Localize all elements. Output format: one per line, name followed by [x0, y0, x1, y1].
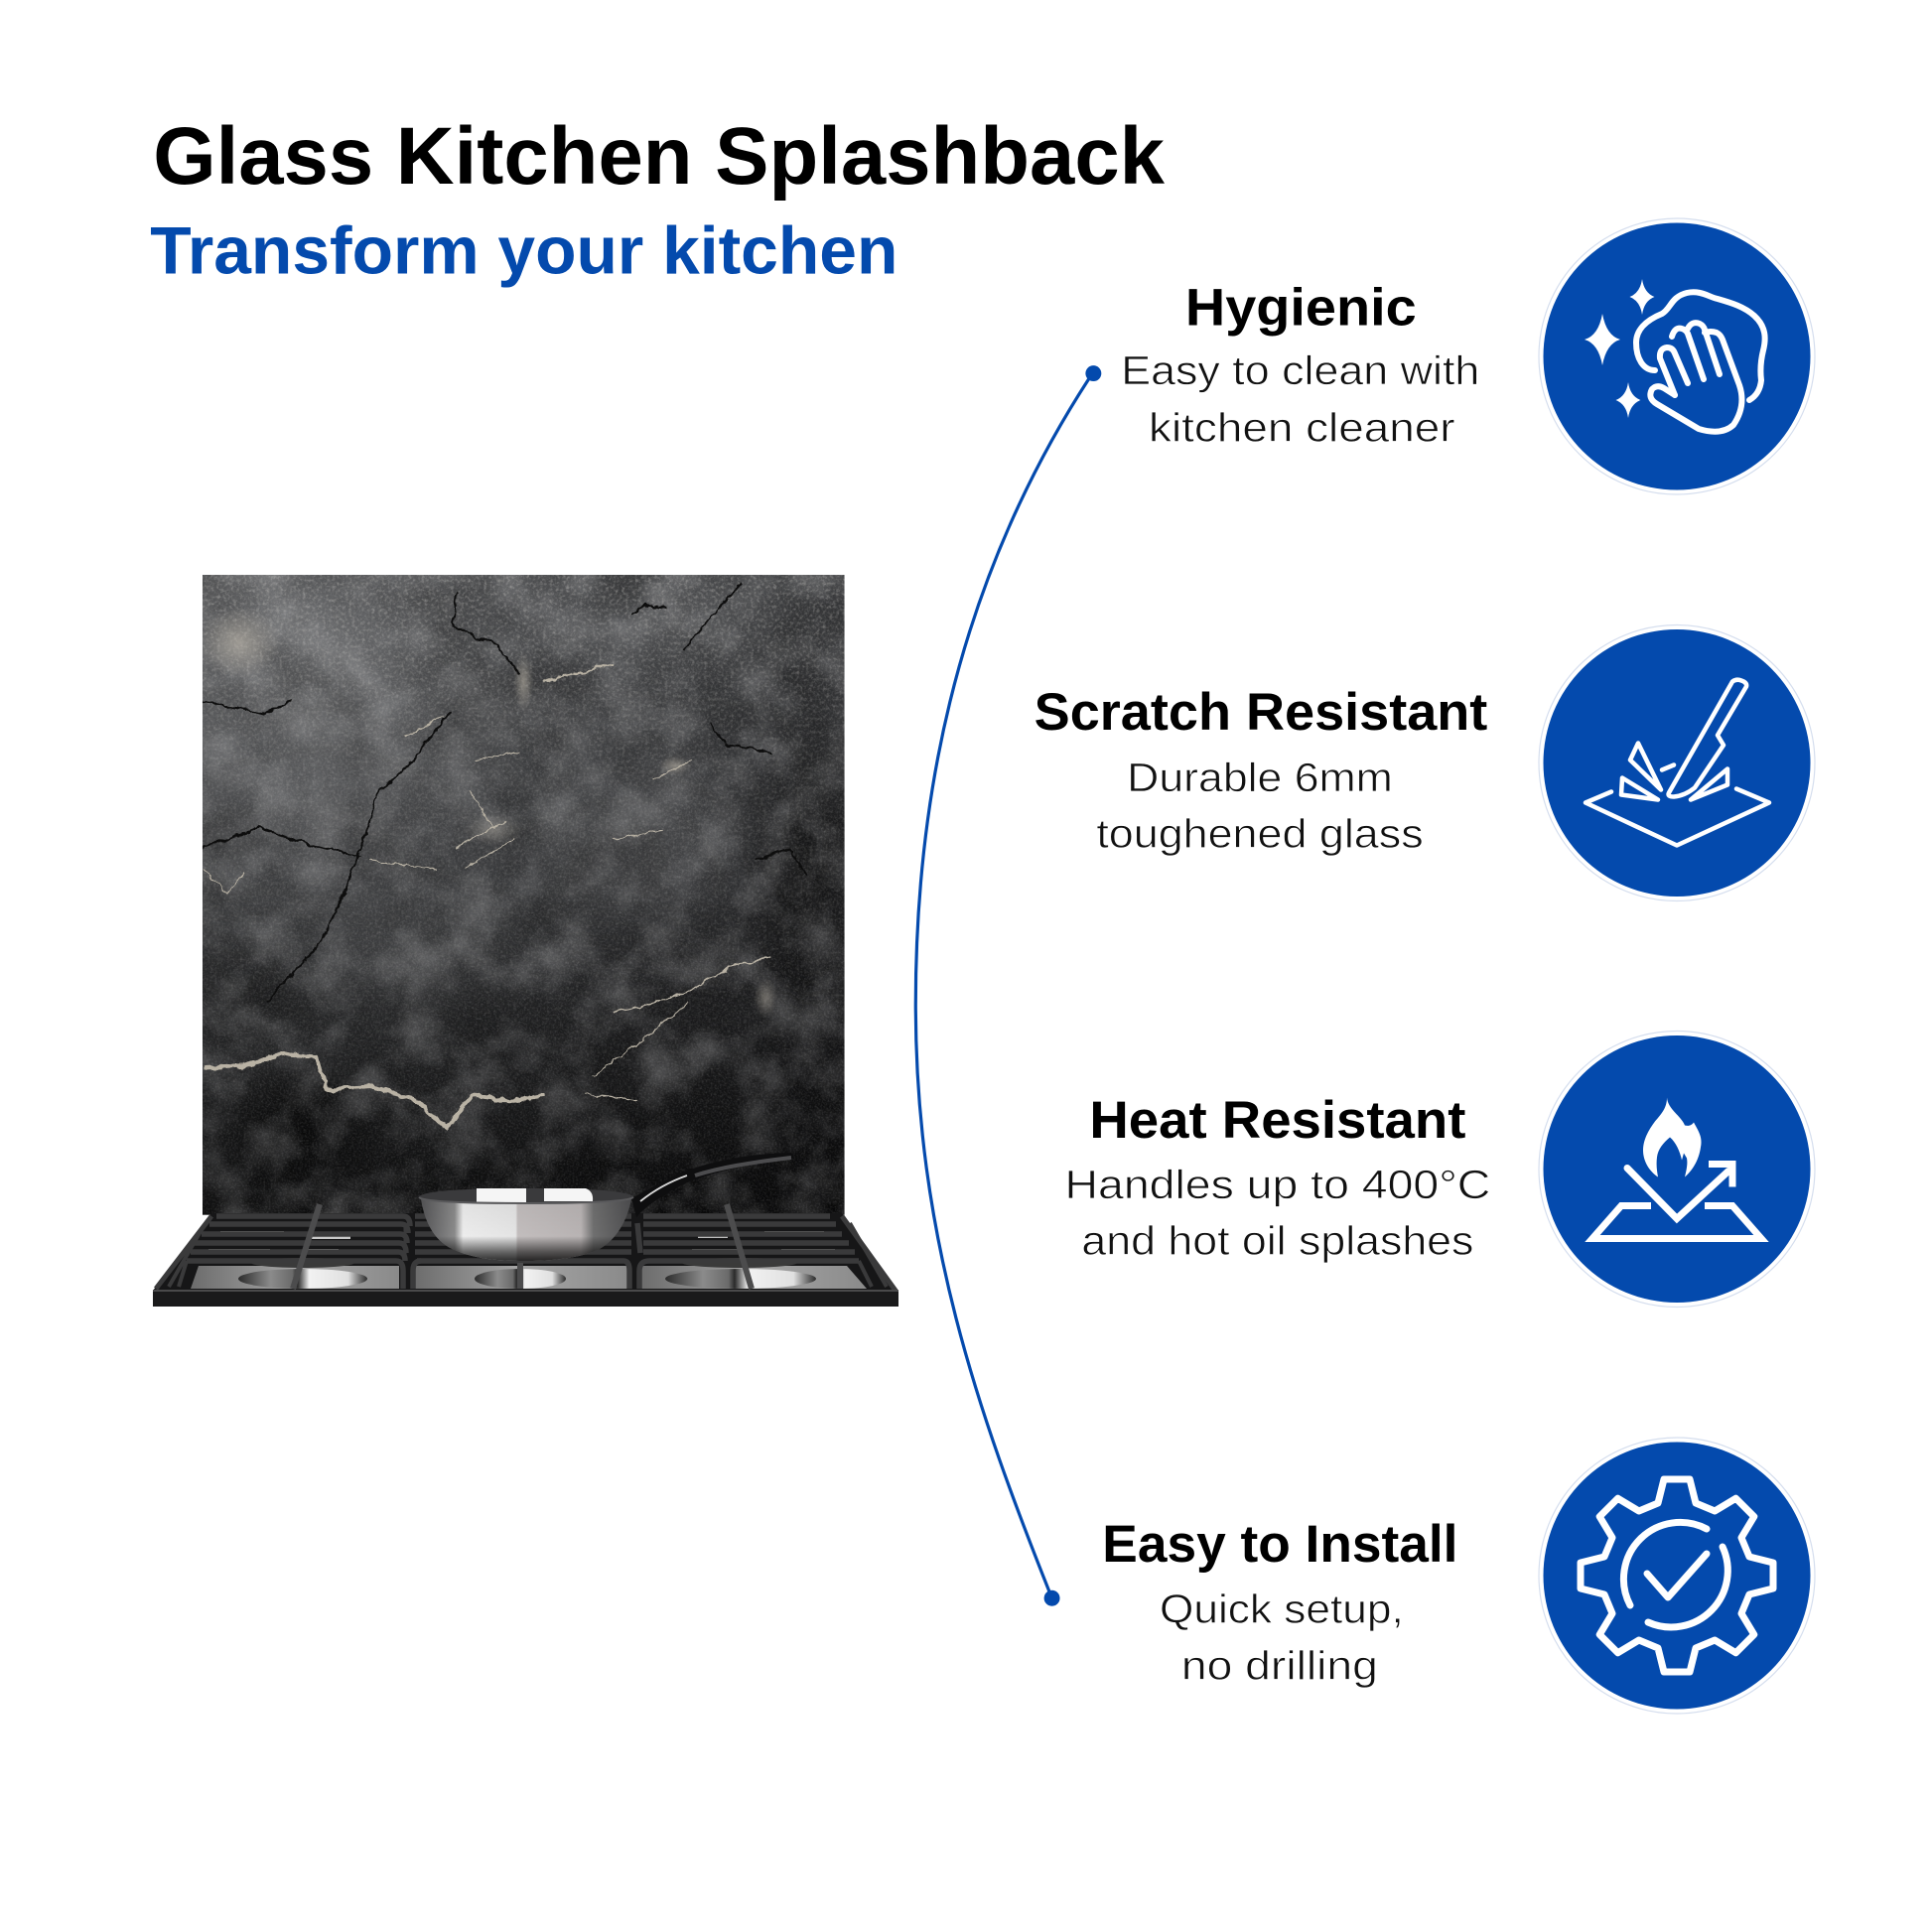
feature: hygienic text: Easy to clean with [1121, 347, 1479, 393]
feature: heat resistant text [1065, 1091, 1490, 1264]
pan rim [419, 1188, 633, 1203]
subtitle: Transform your kitchen [150, 214, 897, 289]
feature: heat resistant text: Handles up to 400°C [1065, 1162, 1490, 1207]
curve dot top [1085, 365, 1101, 381]
connector curve [915, 365, 1101, 1606]
hob outer frame rails [156, 1216, 896, 1291]
feature: heat resistant text: and hot oil splashes [1081, 1218, 1473, 1264]
feature: scratch resistant text: Durable 6mm [1127, 755, 1393, 800]
feature: scratch resistant text: Scratch Resistant [1035, 683, 1487, 742]
feature: scratch resistant text [1035, 683, 1487, 857]
product image: gas hob with pan [153, 1153, 898, 1307]
feature: easy to install text: no drilling [1181, 1642, 1378, 1688]
feature: heat resistant text: Heat Resistant [1089, 1091, 1465, 1150]
product image: splashback panel [203, 575, 845, 1215]
icon: gear with check mark [1539, 1438, 1815, 1714]
feature: hygienic text [1121, 278, 1479, 451]
feature: easy to install text: Quick setup, [1160, 1587, 1404, 1632]
feature: easy to install text [1102, 1515, 1457, 1688]
curve dot bottom [1044, 1590, 1060, 1606]
title: Glass Kitchen Splashback [153, 111, 1166, 202]
hob highlights behind grate [208, 1231, 835, 1253]
icon: hygienic hand wiping [1539, 218, 1815, 494]
feature: easy to install text: Easy to Install [1102, 1515, 1457, 1574]
feature: scratch resistant text: toughened glass [1096, 811, 1424, 857]
cross rods [293, 1204, 752, 1289]
burners [238, 1258, 816, 1289]
icon: knife scratching glass [1539, 625, 1815, 901]
icon: flame on glass [1539, 1031, 1815, 1307]
feature: hygienic text: kitchen cleaner [1149, 405, 1454, 451]
grate side runners [169, 1223, 887, 1287]
grates [169, 1216, 887, 1289]
pan body [421, 1199, 631, 1261]
front edge [153, 1290, 898, 1307]
feature: hygienic text: Hygienic [1185, 278, 1417, 337]
steel trays [191, 1266, 867, 1289]
page content scaled to fit [128, 111, 1166, 1215]
hob base [153, 1213, 898, 1291]
pan handle [631, 1153, 794, 1217]
